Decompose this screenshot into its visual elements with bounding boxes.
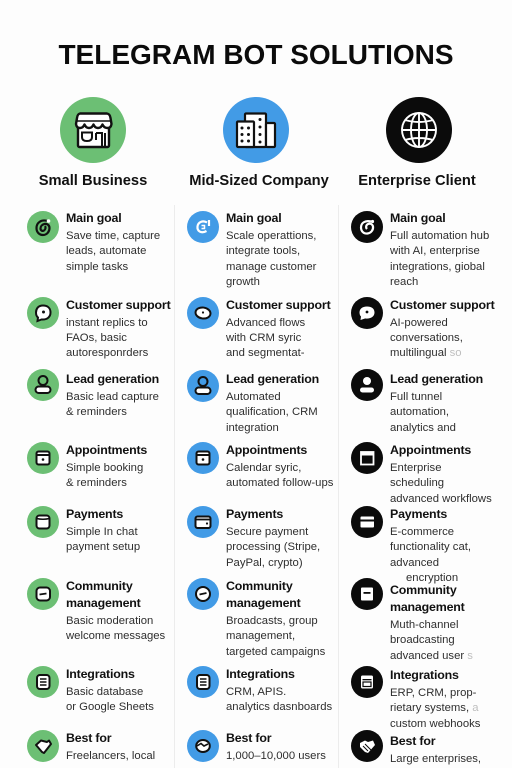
best for: Best for [390,734,435,748]
main goal: simple tasks [66,261,128,273]
payments: Simple In chat [66,526,138,538]
icon: globe [386,97,452,163]
icon: office buildings [223,97,289,163]
main goal: Main goal [66,211,122,225]
community management: broadcasting [390,634,455,646]
payments: encryption [406,572,458,584]
heading: enterprise client: Enterprise Client [358,172,476,188]
lead generation: automation, [390,406,449,418]
appointments: automated follow-ups [226,477,333,489]
lead generation: analytics and [390,422,456,434]
community management [27,578,165,642]
customer support: instant replics to [66,316,148,328]
payments [187,506,320,569]
lead generation [187,370,319,434]
lead generation: & reminders [66,406,127,418]
appointments: & reminders [66,477,127,489]
payments: functionality cat, [390,541,471,553]
main goal: Scale operattions, [226,230,316,242]
payments: Secure payment [226,526,308,538]
lead generation [351,369,483,434]
community management: welcome messages [66,630,165,642]
lead generation: Basic lead capture [66,391,159,403]
customer support [27,297,171,359]
main goal: Main goal [390,211,446,225]
payments: Payments [66,507,123,521]
best for [351,730,481,765]
appointments [187,442,333,489]
appointments: Appointments [66,443,147,457]
community management: Muth-channel [390,619,458,631]
appointments: Simple booking [66,462,143,474]
main goal: leads, automate [66,245,146,257]
community management: targeted campaigns [226,646,325,658]
appointments: Calendar syric, [226,462,301,474]
best for: Best for [66,731,111,745]
integrations: Integrations [390,668,459,682]
integrations: Integrations [226,667,295,681]
payments: Payments [226,507,283,521]
integrations: custom webhooks [390,718,480,730]
community management: Community [390,583,457,597]
customer support [351,297,495,359]
community management: Community [66,579,133,593]
payments [351,506,471,584]
payments: E-commerce [390,526,454,538]
best for [187,730,326,762]
main goal: integrate tools, [226,245,300,257]
main goal: manage customer [226,261,316,273]
integrations [27,666,154,713]
payments: payment setup [66,541,140,553]
panel: mid-sized company column [187,211,333,762]
community management: management, [226,630,295,642]
customer support: Customer support [66,298,171,312]
best for: Freelancers, local [66,750,155,762]
customer support: multilingual so [390,347,462,359]
title: TELEGRAM BOT SOLUTIONS [58,39,454,70]
panel: enterprise client column [351,211,495,765]
community management: management [226,596,301,610]
best for: Large enterprises, [390,753,481,765]
main goal: with AI, enterprise [390,245,480,257]
main goal: Save time, capture [66,230,160,242]
main goal: Main goal [226,211,282,225]
heading: small business: Small Business [39,172,147,188]
community management [187,578,325,658]
appointments [351,442,492,505]
payments: processing (Stripe, [226,541,320,553]
payments: Payments [390,507,447,521]
best for [27,730,155,762]
customer support: AI-powered [390,316,448,328]
community management [351,578,473,662]
appointments: Enterprise [390,462,442,474]
best for: Best for [226,731,271,745]
lead generation: Lead generation [66,372,159,386]
integrations: Integrations [66,667,135,681]
integrations [351,666,480,730]
community management: Basic moderation [66,615,153,627]
appointments: Appointments [390,443,471,457]
main goal [187,211,316,288]
main goal: integrations, giobal [390,261,485,273]
customer support: Customer support [390,298,495,312]
customer support: and segmentat- [226,347,304,359]
customer support: Customer support [226,298,331,312]
payments: advanced [390,557,439,569]
lead generation: Lead generation [226,372,319,386]
lead generation: Automated [226,391,281,403]
integrations: ERP, CRM, prop- [390,687,476,699]
icon: storefront [60,97,126,163]
heading: mid-sized company: Mid-Sized Company [189,172,329,188]
panel: small business column [27,211,171,762]
payments: PayPal, crypto) [226,557,303,569]
community management: Broadcasts, group [226,615,318,627]
lead generation: qualification, CRM [226,406,318,418]
main goal: Full automation hub [390,230,489,242]
main goal: growth [226,276,260,288]
integrations: Basic database [66,686,143,698]
integrations: or Google Sheets [66,701,154,713]
best for: 1,000–10,000 users [226,750,326,762]
community management: advanced user s [390,650,473,662]
lead generation: Full tunnel [390,391,442,403]
appointments: Appointments [226,443,307,457]
customer support: with CRM syric [226,332,301,344]
main goal [351,211,489,288]
appointments: scheduling [390,477,444,489]
customer support: FAOs, basic [66,332,127,344]
appointments: advanced workflows [390,493,492,505]
payments [27,506,140,553]
customer support: Advanced flows [226,316,305,328]
customer support: conversations, [390,332,463,344]
lead generation: integration [226,422,279,434]
community management: Community [226,579,293,593]
community management: management [66,596,141,610]
main goal [27,211,160,273]
community management: management [390,600,465,614]
lead generation: Lead generation [390,372,483,386]
integrations: rietary systems, a [390,702,479,714]
appointments [27,442,147,489]
customer support [187,297,331,359]
lead generation [27,369,159,418]
main goal: reach [390,276,418,288]
integrations: analytics dasnboards [226,701,332,713]
integrations: CRM, APIS. [226,686,286,698]
customer support: autoresponrders [66,347,148,359]
integrations [187,666,332,713]
